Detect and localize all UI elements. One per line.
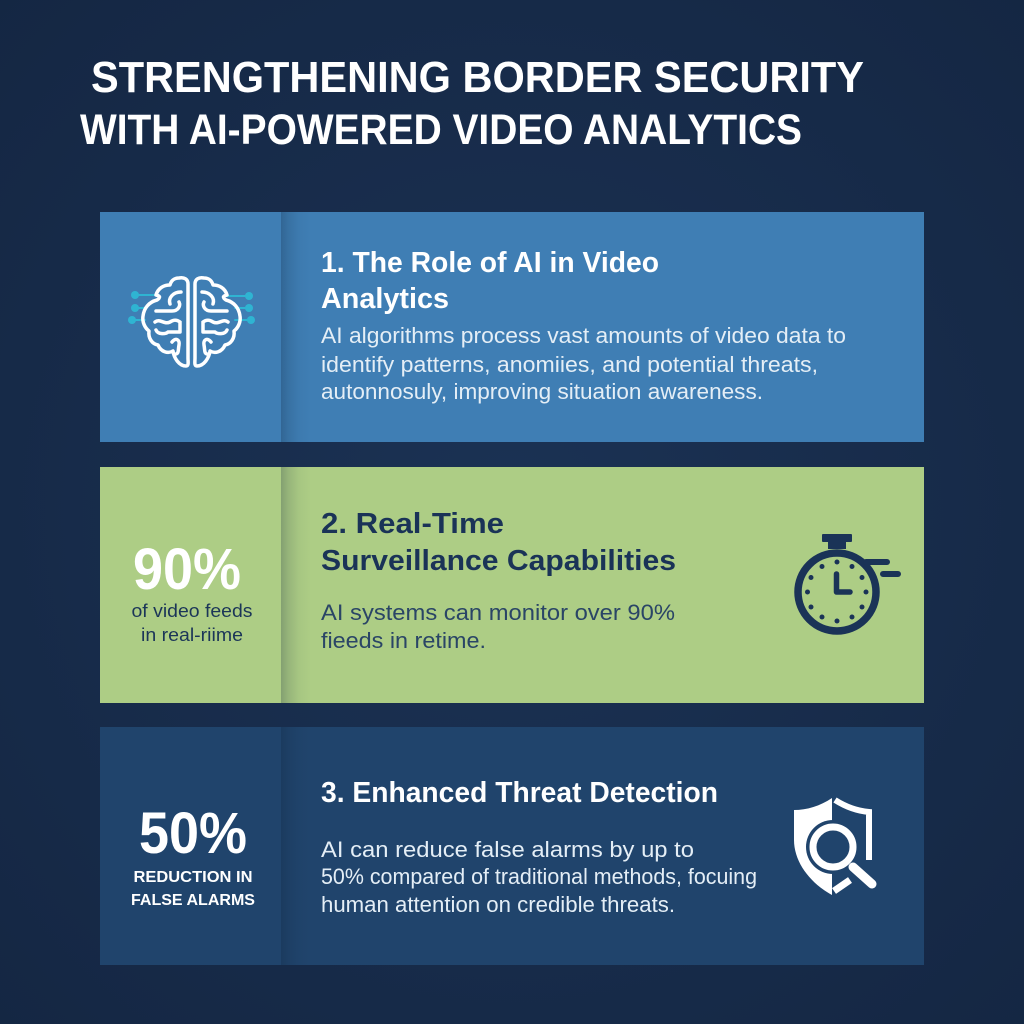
stat: 90% — [132, 537, 252, 645]
body text 2 — [321, 600, 675, 653]
icon: brain with circuit nodes — [128, 278, 255, 366]
stat: 50%: REDUCTION IN — [134, 869, 252, 886]
heading 3: 3. Enhanced Threat Detection — [321, 777, 718, 809]
heading 1: Analytics — [321, 283, 449, 315]
body text 1: AI algorithms process vast amounts of video data to — [321, 323, 846, 348]
heading 2: Surveillance Capabilities — [321, 545, 676, 577]
stat: 50%: FALSE ALARMS — [131, 892, 255, 909]
body text 2: fieeds in retime. — [321, 628, 486, 653]
body text 1: autonnosuly, improving situation awareness. — [321, 379, 763, 404]
stat: 50%: 50% — [139, 801, 247, 866]
icon: shield with magnifier — [794, 798, 872, 895]
body text 1: identify patterns, anomiies, and potential threats, — [321, 352, 818, 377]
title: STRENGTHENING BORDER SECURITY — [91, 53, 864, 102]
heading 2: 2. Real-Time — [321, 508, 504, 540]
stat: 90%: in real-riime — [141, 625, 243, 645]
body text 1 — [321, 323, 846, 404]
body text 3: human attention on credible threats. — [321, 892, 675, 917]
title: WITH AI-POWERED VIDEO ANALYTICS — [80, 107, 802, 154]
panel: the role of AI — [100, 212, 924, 442]
body text 2: AI systems can monitor over 90% — [321, 600, 675, 625]
stat: 50% — [131, 801, 255, 909]
icon: stopwatch — [798, 534, 898, 631]
heading 2 — [321, 508, 676, 577]
heading 1: 1. The Role of AI in Video — [321, 247, 659, 279]
body text 3: 50% compared of traditional methods, focuing — [321, 864, 757, 889]
body text 3: AI can reduce false alarms by up to — [321, 837, 694, 862]
panel: enhanced threat detection — [100, 727, 924, 965]
stat: 90%: of video feeds — [132, 601, 252, 621]
stat: 90%: 90% — [133, 537, 241, 602]
title — [80, 53, 864, 154]
panel: real-time surveillance — [100, 467, 924, 703]
body text 3 — [321, 837, 757, 917]
heading 1 — [321, 247, 659, 315]
